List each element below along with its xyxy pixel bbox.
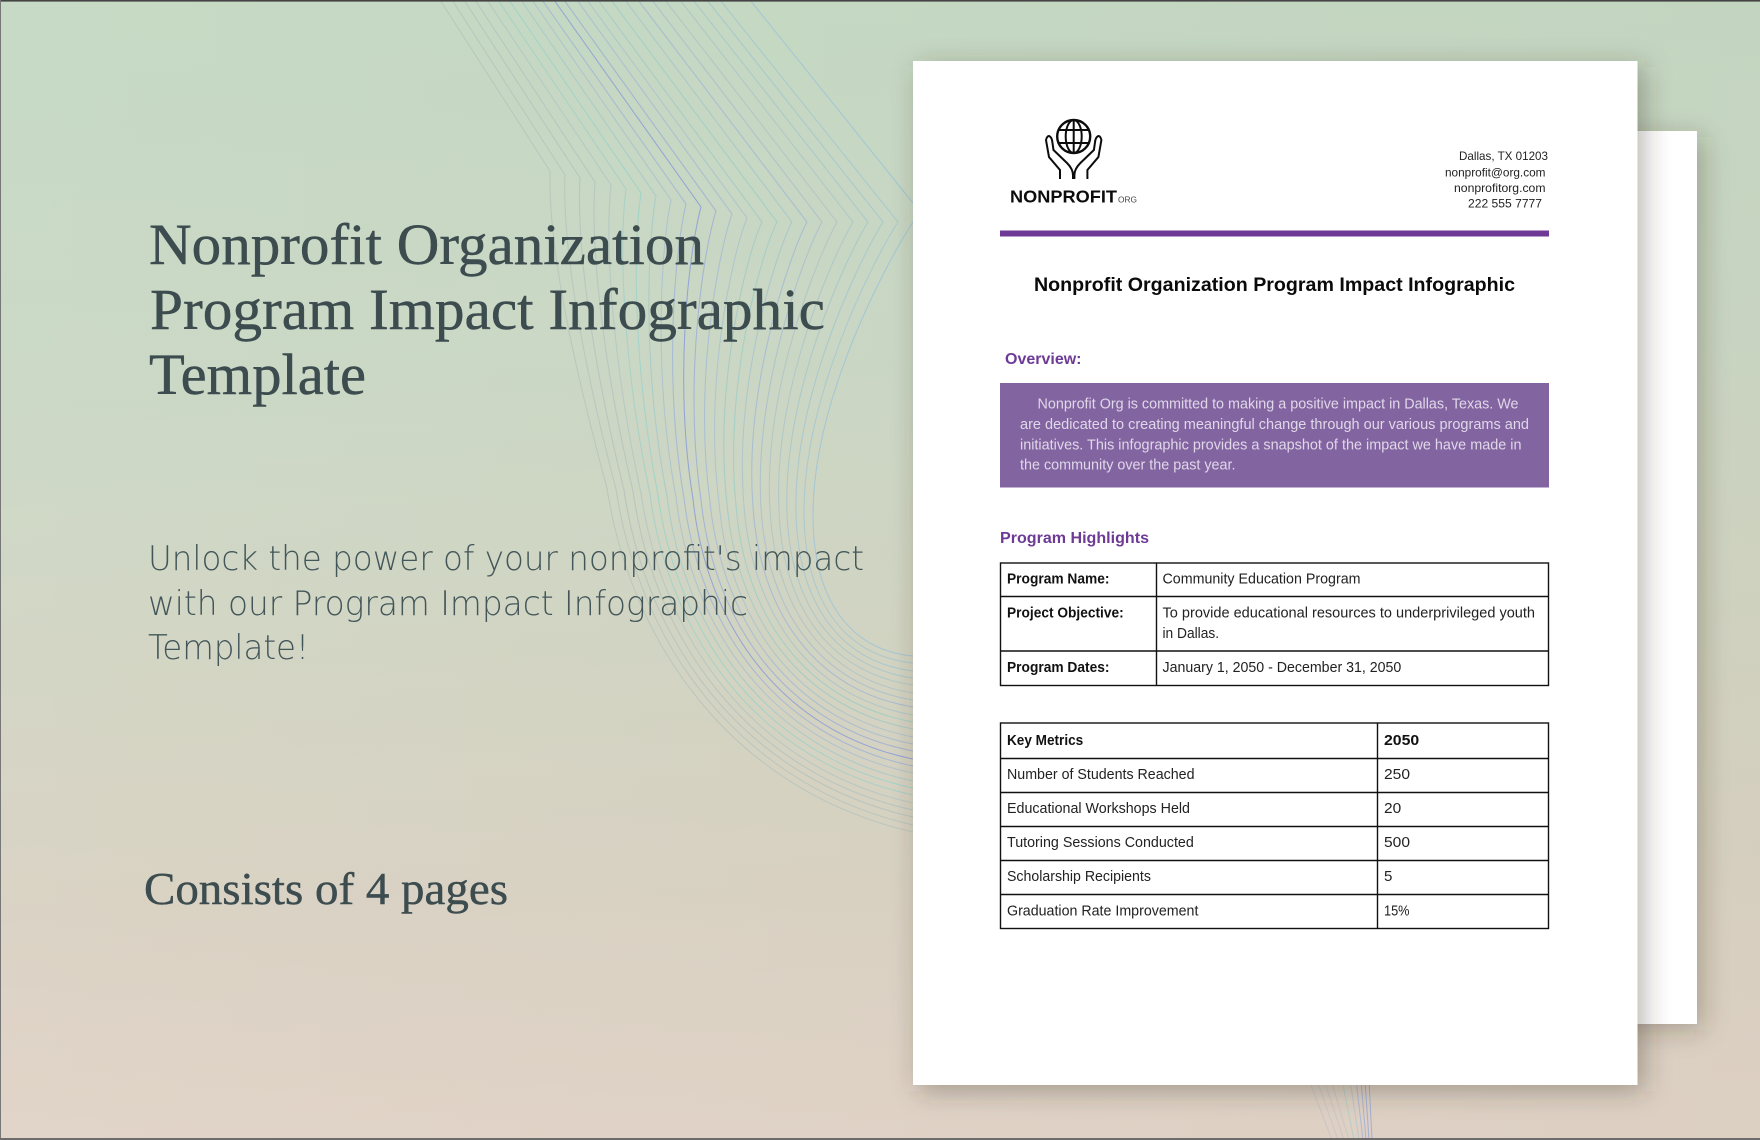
heading: main title: Nonprofit Organization [149, 212, 704, 277]
table: key metrics: 15% [1384, 903, 1410, 919]
heading: program highlights: Program Highlights [1000, 530, 1149, 547]
text: page count: Consists of 4 pages [144, 863, 508, 914]
heading: main title: Template [149, 342, 366, 407]
table: key metrics: Educational Workshops Held [1007, 801, 1190, 817]
table: program highlights [1000, 563, 1548, 686]
table: key metrics: Tutoring Sessions Conducted [1007, 835, 1194, 851]
table: key metrics: 250 [1384, 767, 1410, 783]
table: key metrics [1000, 723, 1548, 928]
decorative wave lines [440, 0, 913, 832]
panel: overview text box: Nonprofit Org is committed to making a positive impact in Dallas, Texas. We [1038, 396, 1518, 412]
heading: main title: Program Impact Infographic [150, 277, 825, 342]
table: program highlights: January 1, 2050 - December 31, 2050 [1162, 660, 1401, 676]
table: key metrics: 500 [1384, 835, 1410, 851]
logo wordmark: NONPROFIT [1010, 186, 1117, 206]
table: key metrics: Graduation Rate Improvement [1007, 903, 1198, 919]
table: program highlights: To provide educational resources to underprivileged youth [1162, 606, 1535, 622]
document title: Nonprofit Organization Program Impact Infographic [1034, 274, 1515, 296]
heading: overview: Overview: [1005, 351, 1082, 368]
back page [1400, 131, 1702, 1030]
table: key metrics: 5 [1384, 869, 1392, 885]
contact details: 222 555 7777 [1468, 196, 1542, 210]
text block: tagline [148, 539, 864, 668]
table: key metrics: 2050 [1384, 733, 1419, 749]
contact details: nonprofitorg.com [1454, 181, 1546, 195]
panel: overview text box: initiatives. This infographic provides a snapshot of the impact we have made in [1020, 437, 1522, 453]
wave lines below the page [1309, 1080, 1372, 1140]
table: key metrics: 20 [1384, 801, 1401, 817]
table: program highlights: in Dallas. [1162, 626, 1219, 642]
contact details: Dallas, TX 01203 [1459, 149, 1548, 163]
table: program highlights: Program Dates: [1007, 660, 1110, 676]
table: key metrics: Number of Students Reached [1007, 767, 1194, 783]
table: key metrics: Scholarship Recipients [1007, 869, 1151, 885]
table: program highlights: Project Objective: [1007, 606, 1124, 622]
table: program highlights: Program Name: [1007, 572, 1110, 588]
text block: tagline: with our Program Impact Infographic [148, 584, 748, 624]
panel: overview text box: are dedicated to creating meaningful change through our various programs and [1020, 417, 1529, 433]
text block: tagline: Unlock the power of your nonprofit's impact [148, 539, 864, 579]
panel: overview text box [1000, 383, 1549, 488]
contact details: nonprofit@org.com [1445, 166, 1546, 180]
table: program highlights: Community Education Program [1162, 572, 1360, 588]
contact details [1445, 149, 1548, 210]
logo wordmark: ORG [1118, 196, 1137, 204]
icon: hands holding globe logo [1046, 120, 1101, 179]
header rule [1000, 230, 1549, 236]
table: key metrics: Key Metrics [1007, 733, 1083, 749]
text block: tagline: Template! [148, 628, 309, 668]
panel: front document page [913, 61, 1644, 1091]
heading: main title [149, 212, 825, 407]
panel: overview text box: the community over the past year. [1020, 458, 1236, 474]
